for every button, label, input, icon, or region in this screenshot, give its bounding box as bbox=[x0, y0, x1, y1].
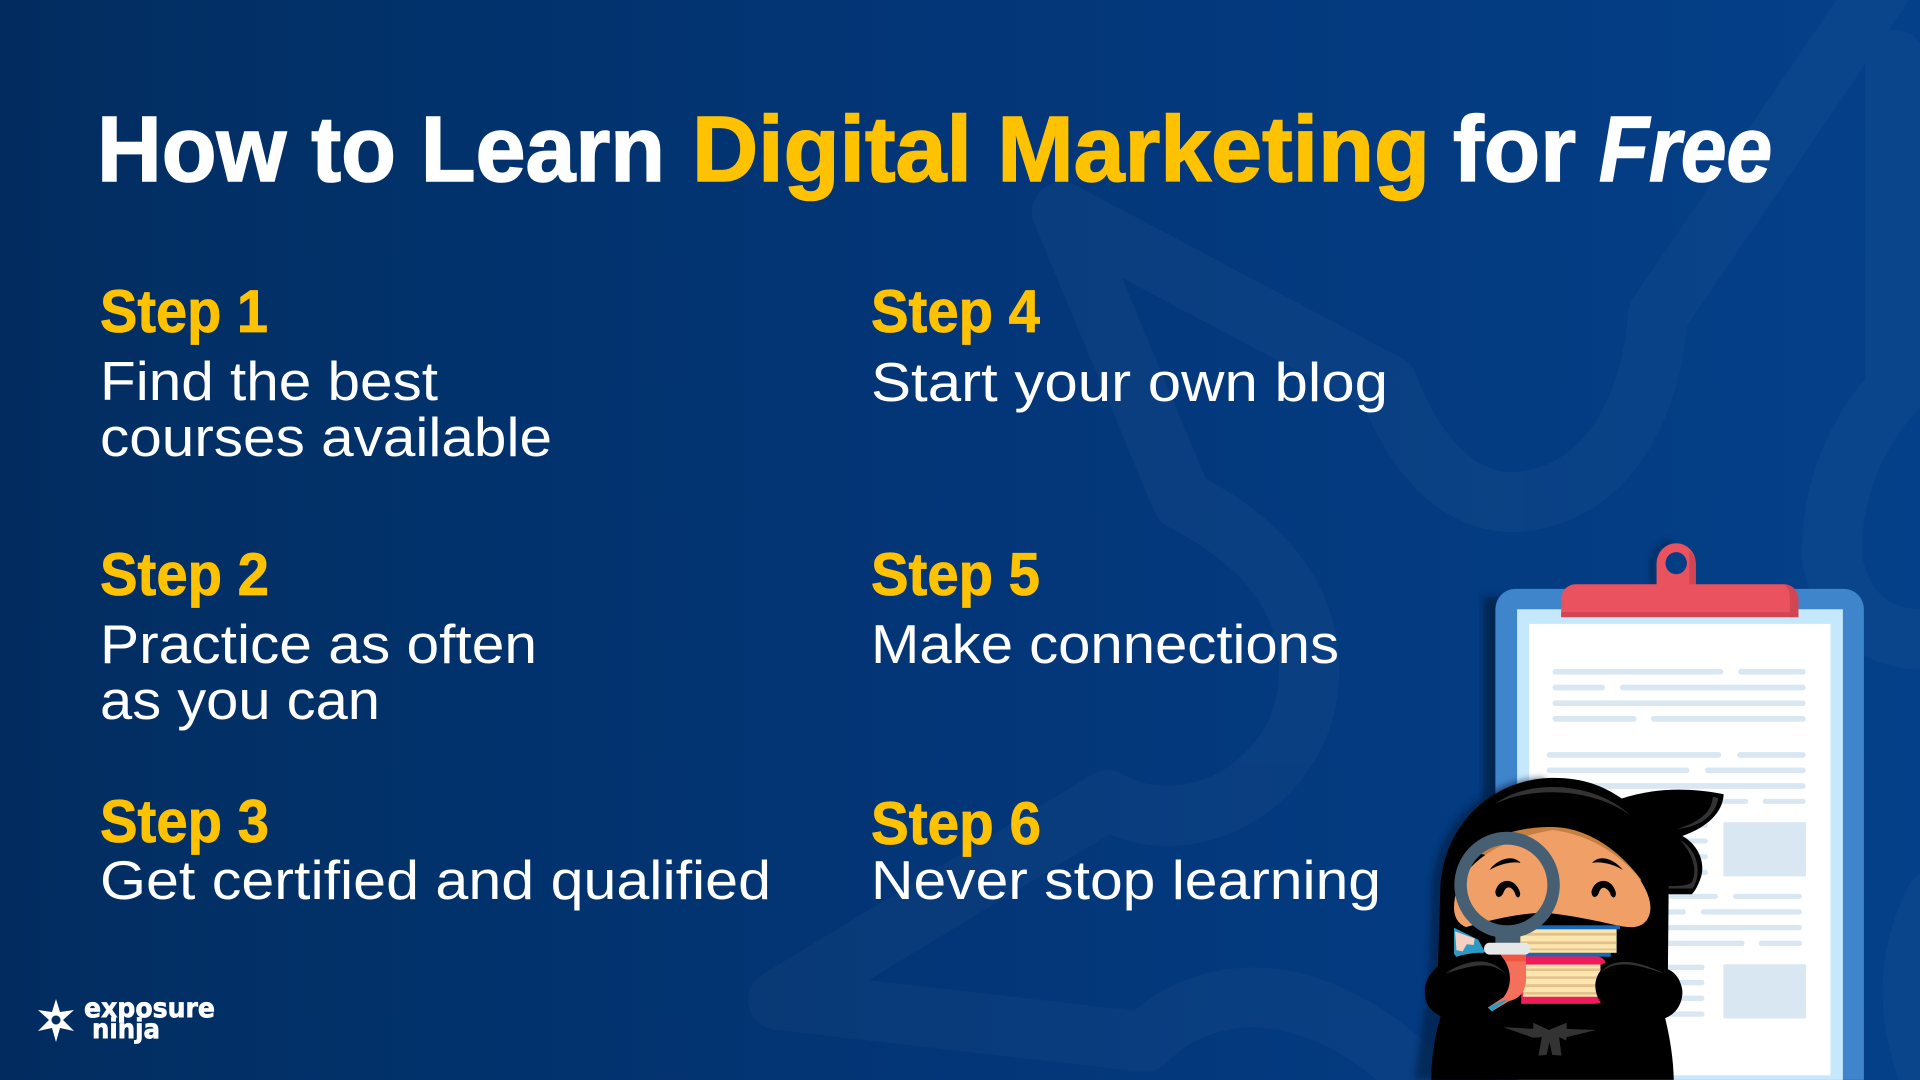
logo: exposure ninja: ninja bbox=[92, 1014, 160, 1045]
step 3: Step 3 bbox=[100, 788, 269, 855]
clipboard bbox=[1483, 543, 1864, 1080]
step 5: Step 5 bbox=[871, 541, 1040, 608]
step 2: Step 2 bbox=[100, 541, 269, 608]
step 1: Find the best bbox=[100, 350, 438, 412]
document lines bbox=[1547, 669, 1806, 1019]
title: How to Learn bbox=[97, 97, 665, 201]
hood highlights bbox=[1495, 787, 1718, 889]
logo: exposure ninja bbox=[38, 993, 215, 1045]
step 2 bbox=[100, 541, 537, 731]
title bbox=[97, 97, 1772, 201]
hands bbox=[1425, 953, 1682, 1020]
step 4: Start your own blog bbox=[871, 351, 1388, 413]
title: Free bbox=[1599, 97, 1772, 201]
face bbox=[1454, 827, 1650, 927]
step 6: Never stop learning bbox=[871, 849, 1381, 911]
step 4: Step 4 bbox=[871, 278, 1041, 345]
clip bbox=[1561, 543, 1798, 617]
step 1 bbox=[100, 278, 552, 468]
step 2: Practice as often bbox=[100, 613, 537, 675]
title: for bbox=[1453, 97, 1576, 201]
logo: exposure ninja: exposure bbox=[84, 993, 215, 1024]
ninja body and hood bbox=[1426, 778, 1724, 1080]
illustration: clipboard and ninja bbox=[1414, 543, 1864, 1080]
belt knot bbox=[1503, 1023, 1596, 1056]
title: Digital Marketing bbox=[692, 97, 1430, 201]
step 5: Make connections bbox=[871, 613, 1339, 675]
step 1: courses available bbox=[100, 406, 552, 468]
magnifying glass bbox=[1461, 838, 1554, 1011]
step 6 bbox=[871, 790, 1381, 911]
step 6: Step 6 bbox=[871, 790, 1041, 857]
icon: shuriken bbox=[38, 999, 74, 1042]
books bbox=[1520, 925, 1620, 1004]
step 4 bbox=[871, 278, 1388, 413]
step 3 bbox=[100, 788, 771, 911]
ninja bbox=[1414, 778, 1724, 1080]
eyes and brows bbox=[1490, 858, 1623, 897]
step 3: Get certified and qualified bbox=[100, 849, 771, 911]
step 2: as you can bbox=[100, 669, 380, 731]
pencil bbox=[1454, 928, 1485, 960]
step 1: Step 1 bbox=[100, 278, 268, 345]
hand highlights bbox=[1445, 961, 1664, 974]
step 5 bbox=[871, 541, 1339, 675]
